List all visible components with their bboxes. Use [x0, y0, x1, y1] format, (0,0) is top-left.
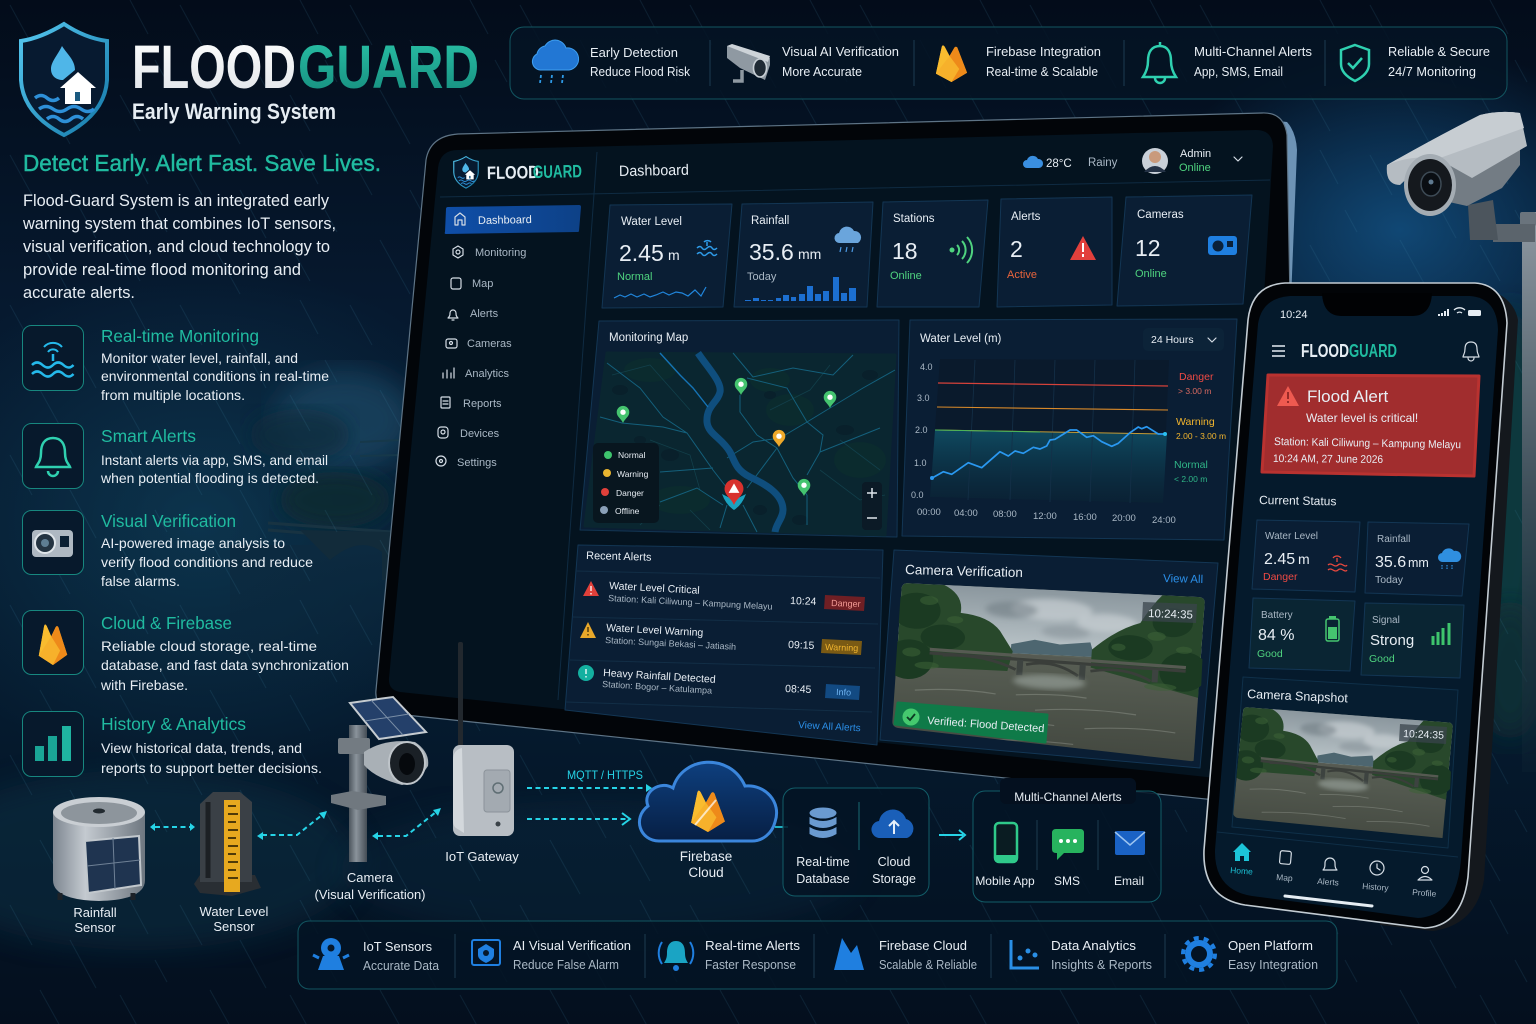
tablet screen: [389, 130, 1273, 780]
phone card: rainfall: Today: [1375, 574, 1404, 586]
timestamp: [1142, 602, 1197, 623]
panel: water level chart: [902, 319, 1237, 540]
device: water level sensor: [194, 792, 261, 896]
intro paragraph: [22, 192, 336, 302]
icon: gear: [1183, 938, 1215, 970]
map pin: red danger: [722, 479, 746, 510]
label: water level sensor: [200, 904, 269, 934]
map legend: Warning: [617, 469, 649, 479]
feature: smart alerts: when potential flooding is detected.: [100, 470, 319, 486]
nav: home: Home: [1230, 865, 1253, 877]
feature: visual verification: AI-powered image analysis to: [101, 535, 285, 551]
snapshot timestamp: [1399, 724, 1447, 744]
panel: database and storage: Database: [796, 872, 850, 886]
phone header: GUARD: [1349, 341, 1397, 361]
nav item: map: [451, 278, 493, 290]
arrow: cloud to database: [775, 826, 788, 828]
chart plot: [930, 359, 1169, 503]
card: alerts: Active: [1007, 269, 1037, 281]
snapshot timestamp: 10:24:35: [1403, 728, 1444, 742]
icon: bell: [1143, 42, 1176, 83]
dropdown: [1143, 328, 1224, 351]
intro paragraph: warning system that combines IoT sensors,: [22, 215, 336, 233]
logo: shield: [21, 24, 107, 135]
panel: database and storage: Real-time: [796, 855, 850, 869]
item: real-time alerts: [659, 938, 801, 972]
alert row: rainfall: Info: [836, 687, 851, 698]
panel: water level chart: 4.0: [920, 362, 933, 372]
map zoom controls: [862, 482, 882, 530]
panel: monitoring map: [580, 320, 899, 537]
phone device: [1204, 283, 1518, 931]
map pin: green: [617, 406, 629, 423]
panel: water level chart: Normal: [1174, 459, 1208, 471]
card: rainfall: [734, 202, 873, 307]
card: rainfall: 35.6: [749, 239, 794, 265]
phone card: water level: [1252, 520, 1360, 592]
panel: recent alerts: View All Alerts: [798, 720, 861, 734]
item: open platform: [1183, 938, 1318, 972]
map legend: Offline: [615, 506, 640, 516]
feature: visual verification: false alarms.: [101, 573, 180, 589]
phone card: water level: Water Level: [1265, 531, 1318, 542]
panel: water level chart: < 2.00 m: [1174, 474, 1207, 484]
icon: camera: [22, 510, 84, 574]
card: alerts: [997, 197, 1112, 307]
tablet header: Admin: [1180, 148, 1211, 160]
phone notch: [1322, 293, 1432, 316]
phone card: signal: [1361, 603, 1464, 678]
icon: AI eye: [472, 940, 500, 965]
map legend: Normal: [618, 450, 646, 460]
nav: home: [1230, 843, 1253, 877]
feature: smart alerts: Smart Alerts: [101, 426, 196, 446]
icon: security camera: [727, 44, 770, 81]
alert row: rainfall: Station: Bogor – Katulampa: [602, 679, 712, 696]
panel: recent alerts: Recent Alerts: [586, 550, 652, 564]
nav item: settings: Settings: [457, 457, 497, 469]
alert row: rainfall: [578, 665, 860, 700]
phone card: signal: Strong: [1370, 632, 1414, 649]
phone card: rainfall: 35.6: [1375, 554, 1406, 571]
phone card: battery: [1249, 598, 1355, 671]
card: water level: Water Level: [621, 216, 682, 228]
panel: camera verification: View All: [1163, 573, 1203, 586]
panel: water level chart: Warning: [1176, 416, 1215, 428]
phone status bar: 10:24: [1280, 309, 1308, 321]
nav item active: dashboard: Dashboard: [478, 214, 532, 227]
panel: water level chart: > 3.00 m: [1178, 386, 1211, 396]
label: IoT gateway: IoT Gateway: [445, 849, 519, 864]
map legend: [593, 443, 659, 523]
item: data analytics: [1011, 938, 1152, 972]
nav: history: [1362, 861, 1390, 893]
phone screen: [1215, 296, 1498, 918]
panel: multi-channel alerts: SMS: [1054, 874, 1080, 888]
item: IoT sensors: Accurate Data: [363, 959, 439, 973]
feature: visual verification: verify flood conditions and reduce: [101, 554, 313, 570]
arrow: gateway to cloud: [527, 813, 630, 825]
intro paragraph: Flood-Guard System is an integrated early: [23, 192, 330, 210]
tablet device: [376, 113, 1297, 800]
item: real-time alerts: Real-time Alerts: [705, 938, 801, 953]
nav item: monitoring: Monitoring: [475, 247, 526, 259]
tablet header: GUARD: [533, 161, 582, 182]
item: reliable: 24/7 Monitoring: [1388, 65, 1476, 79]
label: rainfall sensor: Rainfall: [73, 905, 117, 920]
timestamp: 10:24:35: [1148, 608, 1193, 622]
item: firebase: [936, 44, 1101, 82]
phone card: battery: Good: [1257, 648, 1283, 660]
phone card: water level: 2.45: [1264, 551, 1295, 568]
phone header: [1272, 341, 1479, 361]
alert row: warning: Station: Sungai Bekasi – Jatiasih: [605, 635, 736, 652]
sidebar: [436, 205, 581, 469]
alert row: critical: 10:24: [790, 595, 817, 608]
map pin: green: [798, 479, 810, 496]
map canvas: [585, 353, 895, 535]
icon: blue flame: [834, 938, 864, 970]
flood alert card: 10:24 AM, 27 June 2026: [1273, 453, 1383, 466]
panel: water level chart: 12:00: [1033, 511, 1057, 522]
nav item: cameras: Cameras: [467, 338, 512, 350]
nav item: reports: [441, 397, 502, 410]
arrow: MQTT: [527, 784, 652, 792]
flood alert card: [1262, 375, 1479, 476]
alert row: rainfall: 08:45: [785, 683, 812, 696]
item: open platform: Open Platform: [1228, 938, 1313, 953]
item: reliable: Reliable & Secure: [1388, 44, 1490, 59]
card: cameras: [1117, 195, 1252, 306]
tablet header: Dashboard: [619, 162, 689, 180]
map pin: green: [735, 378, 747, 395]
nav item active: dashboard: [445, 205, 581, 234]
item: early detection: Reduce Flood Risk: [590, 65, 691, 79]
panel: multi-channel alerts: Mobile App: [975, 874, 1035, 888]
arrow: camera to gateway: [372, 808, 441, 840]
feature: history and analytics: History & Analytics: [101, 714, 246, 734]
nav item: alerts: [448, 308, 499, 320]
feature: smart alerts: [22, 424, 328, 488]
card: stations: Stations: [893, 213, 935, 225]
label: water level sensor: Sensor: [213, 919, 255, 934]
icon: sms: [1052, 829, 1084, 860]
panel: water level chart: Water Level (m): [920, 333, 1002, 345]
tablet header: [454, 148, 1242, 188]
label: camera: Camera: [347, 870, 394, 885]
alert row: critical: Water Level Critical: [609, 580, 700, 597]
phone device: Current Status: [1259, 493, 1337, 508]
nav item: reports: Reports: [463, 398, 502, 410]
tablet bezel: [376, 113, 1290, 800]
phone panel: camera snapshot: Camera Snapshot: [1247, 687, 1349, 705]
label: firebase cloud: Cloud: [688, 865, 724, 880]
feature: history and analytics: View historical data, trends, and: [101, 740, 302, 756]
item: firebase: Firebase Integration: [986, 44, 1101, 59]
label: camera: (Visual Verification): [314, 887, 426, 902]
feature: real-time monitoring: Monitor water level, rainfall, and: [101, 350, 298, 366]
arrow: storage to alerts: [939, 830, 965, 840]
tablet header: FLOOD: [487, 162, 539, 183]
dropdown: 24 Hours: [1151, 334, 1194, 346]
nav: profile: Profile: [1412, 887, 1437, 899]
feature: history and analytics: [22, 712, 322, 776]
alert row: rainfall: Heavy Rainfall Detected: [603, 667, 716, 686]
item: early detection: [532, 40, 691, 83]
feature: real-time monitoring: from multiple locations.: [101, 387, 245, 403]
item: data analytics: Insights & Reports: [1051, 958, 1152, 972]
phone panel: camera snapshot: [1223, 677, 1459, 854]
label: firebase cloud: Firebase: [680, 849, 732, 864]
phone header: FLOOD: [1301, 341, 1349, 361]
item: firebase cloud: Scalable & Reliable: [879, 958, 977, 972]
tablet header: Rainy: [1088, 157, 1118, 169]
phone body: [1204, 283, 1507, 928]
phone bottom navigation: [1230, 843, 1437, 899]
icon: alert bell: [659, 941, 693, 971]
phone card: rainfall: [1365, 522, 1469, 596]
icon: email: [1115, 831, 1145, 855]
nav item: alerts: Alerts: [470, 308, 499, 320]
flood alert card: Water level is critical!: [1306, 411, 1418, 425]
panel: water level chart: 00:00: [917, 507, 941, 518]
icon: rain cloud: [532, 40, 579, 70]
map pin: green: [824, 391, 836, 408]
feature: cloud and firebase: database, and fast data synchronization: [101, 657, 349, 673]
verified badge: Verified: Flood Detected: [927, 715, 1045, 735]
title: FloodGuard: [132, 33, 479, 101]
arrow: water level to camera: [257, 811, 327, 840]
nav item: devices: Devices: [460, 428, 500, 440]
panel: water level chart: Danger: [1179, 371, 1214, 383]
icon: firebase flame: [22, 610, 84, 674]
feature: real-time monitoring: [22, 326, 329, 403]
feature: cloud and firebase: Cloud & Firebase: [101, 613, 232, 633]
panel: database and storage: [783, 788, 929, 896]
phone card: signal: Good: [1369, 653, 1395, 665]
tablet header: 28°C: [1046, 158, 1072, 170]
panel: top benefits bar: [510, 27, 1507, 99]
intro paragraph: provide real-time flood monitoring and: [23, 261, 301, 279]
item: multi-channel: Multi-Channel Alerts: [1194, 44, 1313, 59]
panel: camera verification: Camera Verification: [905, 562, 1023, 580]
icon: cloud storage: [871, 810, 913, 838]
tagline: Detect Early. Alert Fast. Save Lives.: [23, 150, 381, 176]
item: IoT sensors: [313, 938, 439, 973]
phone card: rainfall: mm: [1408, 556, 1429, 570]
item: firebase: Real-time & Scalable: [986, 65, 1098, 79]
panel: water level chart: 24:00: [1152, 515, 1176, 526]
panel: camera verification: [878, 550, 1218, 768]
icon: mobile: [995, 823, 1017, 862]
alert row: warning: Water Level Warning: [606, 622, 704, 639]
tablet back edge: [1270, 120, 1297, 300]
item: open platform: Easy Integration: [1228, 958, 1318, 972]
item: visual AI: [727, 44, 899, 81]
icon: firebase flame: [936, 45, 967, 82]
map legend: Danger: [616, 488, 644, 498]
panel: bottom benefits bar: [298, 921, 1337, 989]
icon: bell: [22, 424, 84, 488]
nav: map: Map: [1276, 872, 1293, 883]
phone outer band: [1380, 284, 1518, 931]
panel: monitoring map: Monitoring Map: [609, 332, 688, 344]
alert row: critical: Station: Kali Ciliwung – Kampung Melayu: [608, 593, 773, 612]
card: water level: [602, 204, 732, 308]
nav: profile: [1412, 866, 1437, 899]
verified badge: [895, 703, 1047, 742]
item: multi-channel: App, SMS, Email: [1194, 65, 1283, 79]
panel: water level chart: 04:00: [954, 508, 978, 519]
feature: cloud and firebase: [22, 610, 349, 693]
label: camera: [314, 870, 426, 902]
card: cameras: Online: [1135, 268, 1167, 280]
intro paragraph: accurate alerts.: [23, 284, 135, 302]
feature: smart alerts: Instant alerts via app, SMS, and email: [101, 452, 328, 468]
tablet header: Online: [1179, 162, 1211, 174]
item: firebase cloud: [834, 938, 977, 972]
icon: chart axes: [1011, 940, 1039, 968]
nav item: settings: [436, 456, 497, 469]
panel: water level chart: 2.0: [915, 425, 928, 435]
alert row: critical: [583, 580, 865, 612]
alert row: warning: Warning: [825, 642, 858, 653]
card: water level: Normal: [617, 271, 652, 283]
map pin: yellow: [773, 430, 785, 447]
panel: water level chart: 08:00: [993, 509, 1017, 520]
panel: feature list: [22, 326, 349, 776]
card: cameras: 12: [1135, 235, 1161, 261]
panel: database and storage: Storage: [872, 872, 916, 886]
item: firebase cloud: Firebase Cloud: [879, 938, 967, 953]
panel: water level chart: 20:00: [1112, 513, 1136, 524]
device: IoT gateway: [453, 642, 514, 836]
device: rainfall sensor: [53, 797, 145, 901]
panel: water level chart: 2.00 - 3.00 m: [1176, 431, 1226, 441]
feature: history and analytics: reports to support better decisions.: [101, 760, 322, 776]
item: visual AI: Visual AI Verification: [782, 44, 899, 59]
item: IoT sensors: IoT Sensors: [363, 939, 432, 954]
label: firebase cloud: [680, 849, 732, 880]
icon: water sensor: [22, 326, 84, 390]
card: rainfall: mm: [798, 246, 821, 262]
IoT devices row: [53, 642, 1161, 935]
label: water level sensor: Water Level: [200, 904, 269, 919]
panel: multi-channel alerts: [973, 778, 1161, 902]
alert row: warning: 09:15: [788, 639, 815, 652]
card: rainfall: Today: [747, 271, 777, 283]
card: stations: [877, 200, 988, 307]
item: AI visual verification: AI Visual Verification: [513, 938, 631, 953]
title: FloodGuard: FLOOD: [132, 33, 296, 101]
feature: visual verification: [22, 510, 313, 589]
phone card: signal: Signal: [1372, 615, 1400, 626]
flood alert card: Station: Kali Ciliwung – Kampung Melayu: [1274, 436, 1461, 451]
nav: alerts: [1317, 858, 1339, 888]
card: cameras: Cameras: [1137, 209, 1184, 221]
intro paragraph: visual verification, and cloud technology to: [23, 238, 330, 256]
phone card: battery: Battery: [1261, 610, 1293, 621]
panel: multi-channel alerts: Multi-Channel Alerts: [1014, 790, 1122, 804]
panel: multi-channel alerts: Email: [1114, 874, 1144, 888]
nav: alerts: Alerts: [1317, 876, 1339, 888]
feature: cloud and firebase: with Firebase.: [100, 677, 188, 693]
panel: recent alerts: [565, 545, 883, 745]
camera photo: [892, 583, 1205, 762]
nav item: analytics: Analytics: [465, 368, 510, 380]
firebase cloud: [639, 762, 777, 841]
label: rainfall sensor: [73, 905, 117, 935]
card: alerts: 2: [1010, 236, 1023, 262]
icon: shield check: [1341, 45, 1369, 81]
title: FloodGuard: GUARD: [298, 33, 479, 101]
panel: database and storage: Cloud: [878, 855, 910, 869]
phone card: battery: 84 %: [1258, 627, 1294, 644]
panel: water level chart: 1.0: [914, 458, 927, 468]
panel: water level chart: 16:00: [1073, 512, 1097, 523]
feature: real-time monitoring: environmental conditions in real-time: [101, 368, 329, 384]
item: AI visual verification: [472, 938, 631, 972]
card: stations: Online: [890, 270, 922, 282]
panel: water level chart: 0.0: [911, 490, 924, 500]
feature: cloud and firebase: Reliable cloud storage, real-time: [101, 638, 317, 654]
flood alert card: Flood Alert: [1307, 387, 1389, 406]
feature: visual verification: Visual Verification: [101, 511, 236, 531]
phone card: water level: m: [1298, 551, 1310, 567]
card: water level: 2.45: [619, 240, 664, 266]
nav: map: [1276, 851, 1293, 883]
phone card: rainfall: Rainfall: [1377, 534, 1410, 545]
arrow: rainfall to water level: [150, 823, 195, 831]
icon: database: [810, 808, 836, 838]
label: rainfall sensor: Sensor: [74, 920, 116, 935]
item: visual AI: More Accurate: [782, 65, 862, 79]
device: camera with solar panel: [331, 697, 428, 862]
phone status bar: [1280, 308, 1481, 321]
icon: bar chart: [22, 712, 84, 776]
panel: water level chart: 3.0: [917, 393, 930, 403]
nav item: map: Map: [472, 278, 493, 290]
snapshot photo: [1233, 707, 1453, 838]
card: alerts: Alerts: [1011, 211, 1041, 223]
alert row: warning: [580, 622, 862, 655]
label: MQTT / HTTPS: MQTT / HTTPS: [567, 768, 643, 782]
item: early detection: Early Detection: [590, 45, 678, 60]
card: stations: 18: [892, 238, 918, 264]
CCTV camera top right: [1387, 112, 1536, 772]
icon: sensor: [313, 938, 349, 970]
nav: history: History: [1362, 881, 1390, 893]
item: reliable: [1341, 44, 1490, 81]
phone card: water level: Danger: [1263, 571, 1298, 583]
feature: real-time monitoring: Real-time Monitoring: [101, 326, 259, 346]
item: real-time alerts: Faster Response: [705, 958, 796, 972]
card: rainfall: Rainfall: [751, 215, 789, 227]
item: data analytics: Data Analytics: [1051, 938, 1137, 953]
nav item: analytics: [443, 368, 510, 380]
nav item: monitoring: [453, 246, 526, 259]
nav item: devices: [438, 427, 500, 440]
alert row: critical: Danger: [831, 598, 861, 609]
nav item: cameras: [446, 338, 512, 350]
subtitle: Early Warning System: [132, 99, 336, 124]
item: multi-channel: [1143, 42, 1313, 83]
item: AI visual verification: Reduce False Alarm: [513, 958, 619, 972]
card: water level: m: [668, 247, 680, 263]
